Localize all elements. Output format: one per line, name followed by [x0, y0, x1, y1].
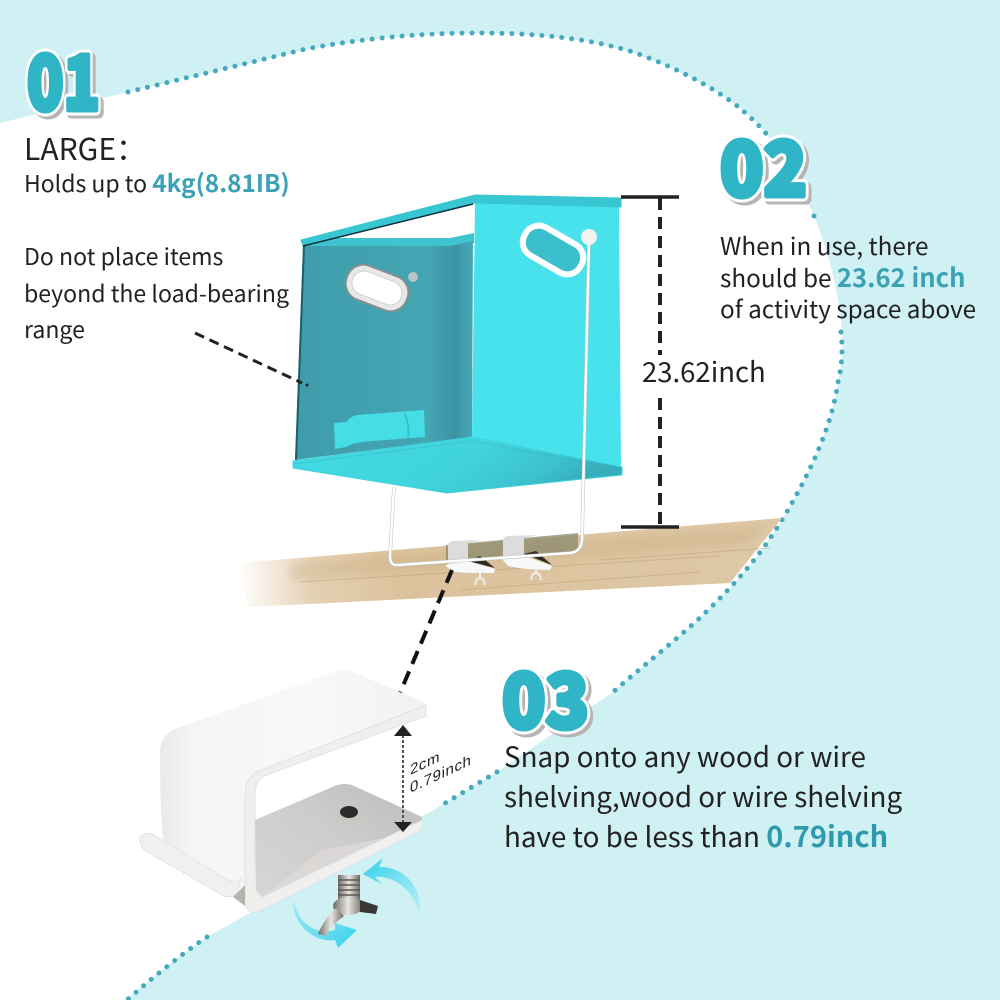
clamp body	[160, 670, 426, 890]
section 01 warning text: beyond the load-bearing	[24, 275, 289, 309]
box inner top strip	[303, 233, 474, 246]
section 02 text: of activity space above	[720, 290, 976, 325]
clamp bottom plate	[255, 784, 422, 897]
rivet	[338, 806, 362, 822]
left handle	[341, 260, 413, 316]
strap	[334, 410, 425, 449]
rotation arrow lower	[293, 900, 357, 948]
box bottom plate	[293, 437, 622, 493]
rotation arrow upper	[363, 858, 420, 917]
section 03 text: Snap onto any wood or wire	[504, 736, 866, 776]
height label: 23.62inch	[642, 350, 766, 390]
section 02 text	[720, 227, 976, 325]
section 01 heading: LARGE：	[24, 125, 146, 169]
section 02 number: 02	[720, 108, 807, 218]
section 03 text	[504, 736, 902, 856]
box right face	[472, 203, 621, 470]
section 03 text: shelving,wood or wire shelving	[504, 776, 902, 816]
leader line to box	[195, 333, 308, 386]
dotted boundary line	[127, 33, 842, 1000]
right handle	[517, 220, 589, 280]
section 01 load text: Holds up to 4kg(8.81IB)	[24, 165, 290, 200]
clamp front edge	[245, 705, 426, 912]
gap dimension arrow	[394, 725, 412, 832]
gap label: 2cm	[410, 749, 440, 779]
section 01 warning text	[24, 238, 289, 345]
section 02 number: 02	[720, 108, 807, 218]
height dimension line	[621, 197, 679, 527]
clamp foot lip	[140, 833, 241, 897]
section 03 number: 03	[502, 640, 589, 750]
section 03 number: 03	[505, 643, 592, 753]
shadow strip under clamps	[446, 533, 578, 562]
storage box	[293, 195, 622, 565]
leader line to clamp	[397, 570, 452, 700]
section 01 warning text: Do not place items	[24, 238, 223, 272]
wood shelf	[238, 518, 782, 607]
section 01 number: 01	[27, 22, 100, 132]
box top rim	[301, 195, 621, 246]
box inner left face	[295, 241, 473, 460]
gap label: 0.79inch	[410, 752, 471, 797]
wire hanger	[390, 240, 589, 565]
section 01 warning text: range	[24, 311, 85, 345]
section 01 number: 01	[27, 22, 100, 132]
section 03 text: have to be less than 0.79inch	[504, 814, 888, 856]
large clamp	[140, 670, 471, 948]
section 01 number: 01	[30, 25, 103, 135]
section 02 text: When in use, there	[720, 227, 929, 262]
section 02 text: should be 23.62 inch	[720, 258, 966, 295]
section 03 number: 03	[502, 640, 589, 750]
small clamps on shelf	[445, 535, 552, 585]
section 02 number: 02	[723, 111, 810, 221]
wing screw	[318, 875, 378, 936]
